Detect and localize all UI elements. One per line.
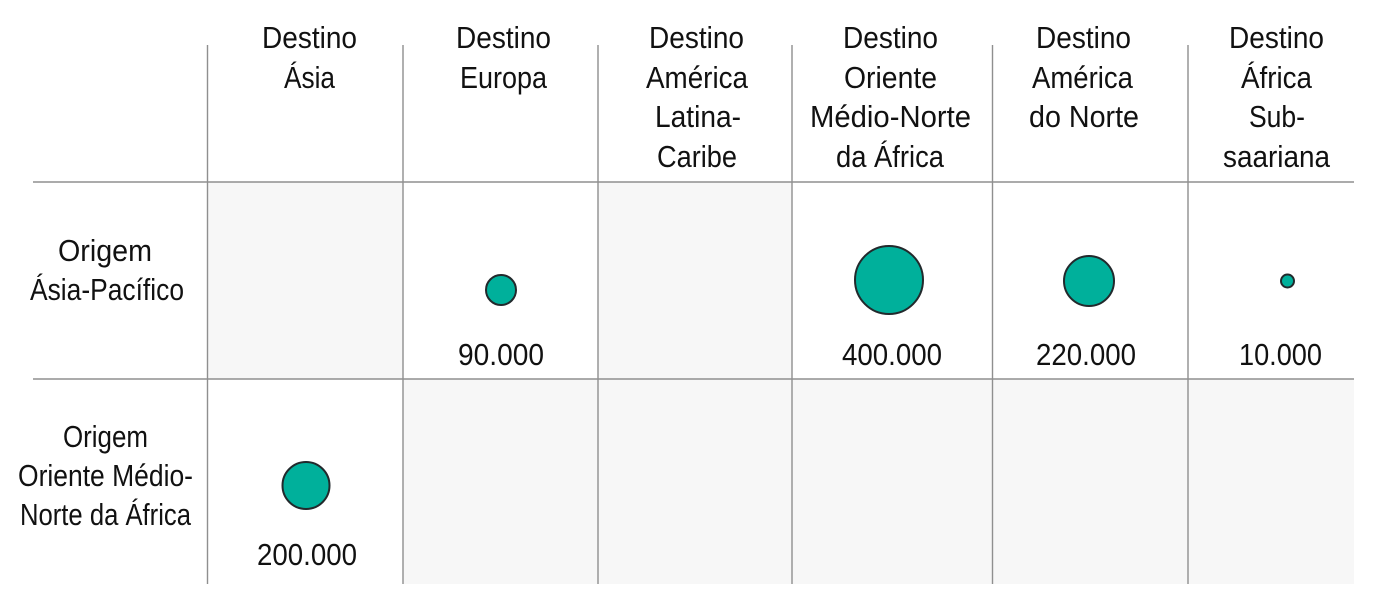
column header: Destino América Latina-Caribe: Destino [649,20,744,55]
data point: Ásia-Pacífico to Europa, 90.000: 90.000 [458,337,544,372]
column header: Destino Ásia: Ásia [284,60,336,95]
column header: Destino África Subsaariana: África [1241,60,1313,95]
data point: Ásia-Pacífico to América do Norte, 220.000 [1036,256,1136,372]
column header: Destino África Subsaariana: saariana [1223,139,1331,174]
data point: Ásia-Pacífico to Oriente Médio-Norte da África, 400.000 [842,246,942,372]
data point: Ásia-Pacífico to Europa, 90.000 [458,275,544,372]
data point: Ásia-Pacífico to América do Norte, 220.000: 220.000 [1036,337,1136,372]
data point: Ásia-Pacífico to África Subsaariana, 10.000: 10.000 [1239,337,1322,372]
data point: Oriente Médio-Norte da África to Ásia, 200.000: 200.000 [257,537,357,572]
column header: Destino Ásia: Destino [262,20,357,55]
column header: Destino Oriente Médio-Norte da África: da África [836,139,945,174]
column header: Destino América Latina-Caribe: Latina- [655,99,741,134]
row header: Origem Ásia-Pacífico [30,233,184,307]
column header: Destino América Latina-Caribe: América [646,60,749,95]
column header: Destino Oriente Médio-Norte da África [810,20,971,174]
column header: Destino América do Norte: América [1032,60,1134,95]
column header: Destino Europa: Destino [456,20,551,55]
row header: Origem Oriente Médio-Norte da África: Norte da África [20,497,192,532]
column header: Destino Oriente Médio-Norte da África: Oriente [844,60,937,95]
column header: Destino Oriente Médio-Norte da África: Médio-Norte [810,99,971,134]
row header: Origem Oriente Médio-Norte da África: Origem [63,419,148,454]
column header: Destino América do Norte: Destino [1036,20,1131,55]
column header: Destino Europa [456,20,551,95]
column header: Destino América do Norte [1029,20,1139,134]
column header: Destino América do Norte: do Norte [1029,99,1139,134]
column header: Destino Oriente Médio-Norte da África: Destino [843,20,938,55]
data point: Ásia-Pacífico to África Subsaariana, 10.000 [1239,274,1322,372]
row header: Origem Oriente Médio-Norte da África [18,419,193,532]
row header: Origem Ásia-Pacífico: Ásia-Pacífico [30,272,184,307]
row header: Origem Oriente Médio-Norte da África: Oriente Médio- [18,458,193,493]
column header: Destino Ásia [262,20,357,95]
column header: Destino África Subsaariana: Destino [1229,20,1324,55]
data point: Ásia-Pacífico to Oriente Médio-Norte da África, 400.000: 400.000 [842,337,942,372]
data point: Oriente Médio-Norte da África to Ásia, 200.000 [257,462,357,572]
column header: Destino África Subsaariana [1223,20,1331,174]
column header: Destino América Latina-Caribe: Caribe [657,139,737,174]
column header: Destino América Latina-Caribe [646,20,749,174]
column header: Destino Europa: Europa [460,60,548,95]
row header: Origem Ásia-Pacífico: Origem [58,233,152,268]
column header: Destino África Subsaariana: Sub- [1249,99,1305,134]
